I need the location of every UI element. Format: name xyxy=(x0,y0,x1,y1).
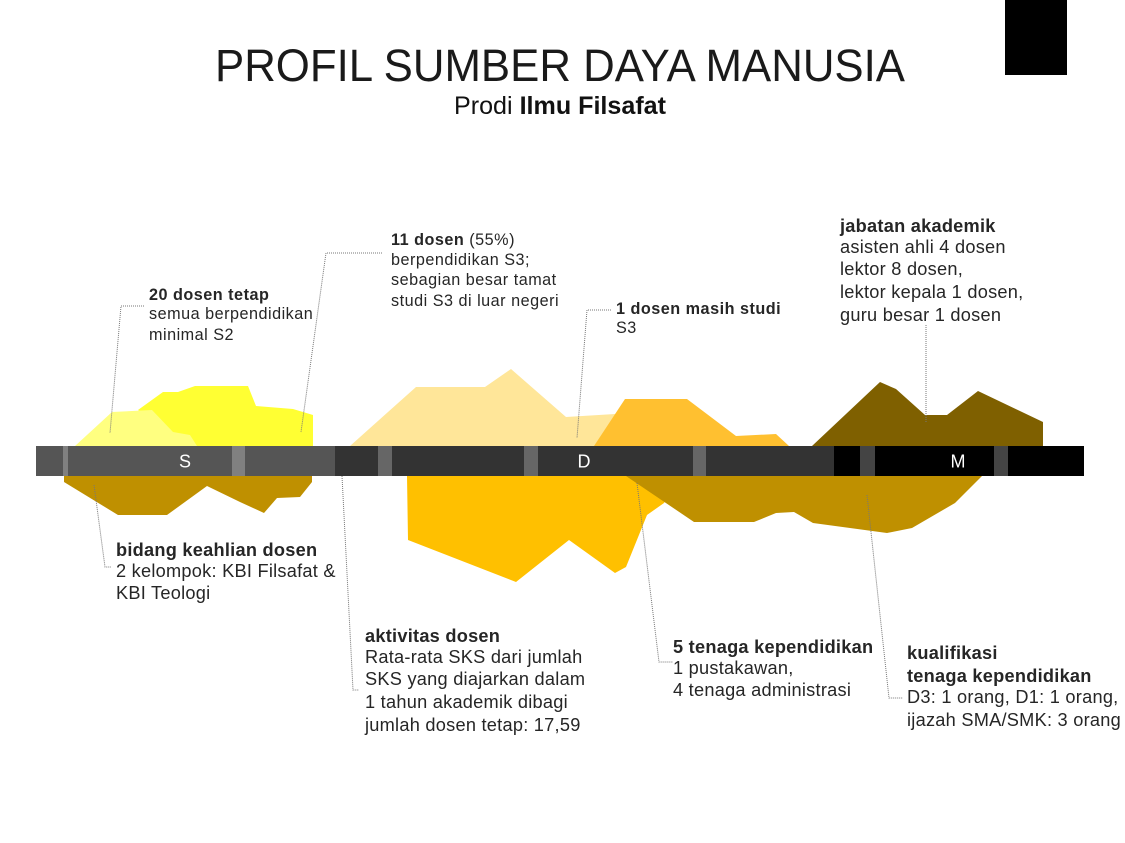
text: kualifikasi tenaga kependidikan: D3: 1 orang, D1: 1 orang, xyxy=(907,687,1118,707)
text: 5 tenaga kependidikan: 5 tenaga kependidikan xyxy=(673,637,873,657)
black corner block xyxy=(1005,0,1067,75)
text: 20 dosen tetap: 20 dosen tetap xyxy=(149,286,269,304)
text: 20 dosen tetap xyxy=(149,286,313,344)
text: 20 dosen tetap: minimal S2 xyxy=(149,326,234,344)
text: jabatan akademik: lektor 8 dosen, xyxy=(840,259,963,279)
text: 11 dosen: berpendidikan S3; xyxy=(391,251,530,269)
segment S: S xyxy=(179,452,191,472)
area chart: D below xyxy=(407,476,680,582)
text: 11 dosen: 11 dosen (55%) xyxy=(391,231,515,249)
text: aktivitas dosen: Rata-rata SKS dari jumlah xyxy=(365,647,583,667)
segment D: D xyxy=(578,452,590,472)
leader lines xyxy=(94,253,926,698)
text: 1 dosen masih studi: S3 xyxy=(616,319,637,337)
area chart: D above xyxy=(350,369,789,446)
segment D xyxy=(335,446,834,476)
timeline bar xyxy=(36,446,1084,476)
text: kualifikasi tenaga kependidikan xyxy=(907,643,1121,730)
text: jabatan akademik: guru besar 1 dosen xyxy=(840,305,1001,325)
text: 5 tenaga kependidikan: 4 tenaga administrasi xyxy=(673,680,851,700)
area chart: S above xyxy=(75,386,313,446)
text: 5 tenaga kependidikan xyxy=(673,637,873,700)
text: bidang keahlian dosen xyxy=(116,540,336,603)
area chart: S below xyxy=(64,476,312,515)
text: 11 dosen: studi S3 di luar negeri xyxy=(391,292,559,310)
title: PROFIL SUMBER DAYA MANUSIA xyxy=(215,40,905,91)
text: kualifikasi tenaga kependidikan: tenaga kependidikan xyxy=(907,666,1092,686)
text: kualifikasi tenaga kependidikan: kualifikasi xyxy=(907,643,998,663)
area chart: D and M below xyxy=(626,476,982,533)
text: jabatan akademik xyxy=(839,216,1023,325)
text: 20 dosen tetap: semua berpendidikan xyxy=(149,305,313,323)
text: bidang keahlian dosen: bidang keahlian dosen xyxy=(116,540,317,560)
subtitle: Prodi Ilmu Filsafat xyxy=(454,92,667,120)
text: 1 dosen masih studi xyxy=(616,300,781,337)
segment S xyxy=(36,446,335,476)
text: 1 dosen masih studi: 1 dosen masih studi xyxy=(616,300,781,318)
segment M: M xyxy=(950,452,966,472)
text: kualifikasi tenaga kependidikan: ijazah SMA/SMK: 3 orang xyxy=(907,710,1121,730)
text: 11 dosen: sebagian besar tamat xyxy=(391,271,557,289)
area chart: M above xyxy=(812,382,1043,446)
text: aktivitas dosen xyxy=(364,626,585,735)
text: aktivitas dosen: 1 tahun akademik dibagi xyxy=(365,692,568,712)
segment M xyxy=(834,446,1084,476)
text: aktivitas dosen: aktivitas dosen xyxy=(365,626,500,646)
text: aktivitas dosen: SKS yang diajarkan dalam xyxy=(365,669,585,689)
text: jabatan akademik: lektor kepala 1 dosen, xyxy=(840,282,1023,302)
text: jabatan akademik: asisten ahli 4 dosen xyxy=(840,237,1006,257)
text: bidang keahlian dosen: 2 kelompok: KBI Filsafat & xyxy=(116,561,336,581)
text: 11 dosen xyxy=(391,231,559,310)
text: 5 tenaga kependidikan: 1 pustakawan, xyxy=(673,658,794,678)
text: bidang keahlian dosen: KBI Teologi xyxy=(116,583,210,603)
text: aktivitas dosen: jumlah dosen tetap: 17,59 xyxy=(364,715,581,735)
text: jabatan akademik: jabatan akademik xyxy=(839,216,996,236)
